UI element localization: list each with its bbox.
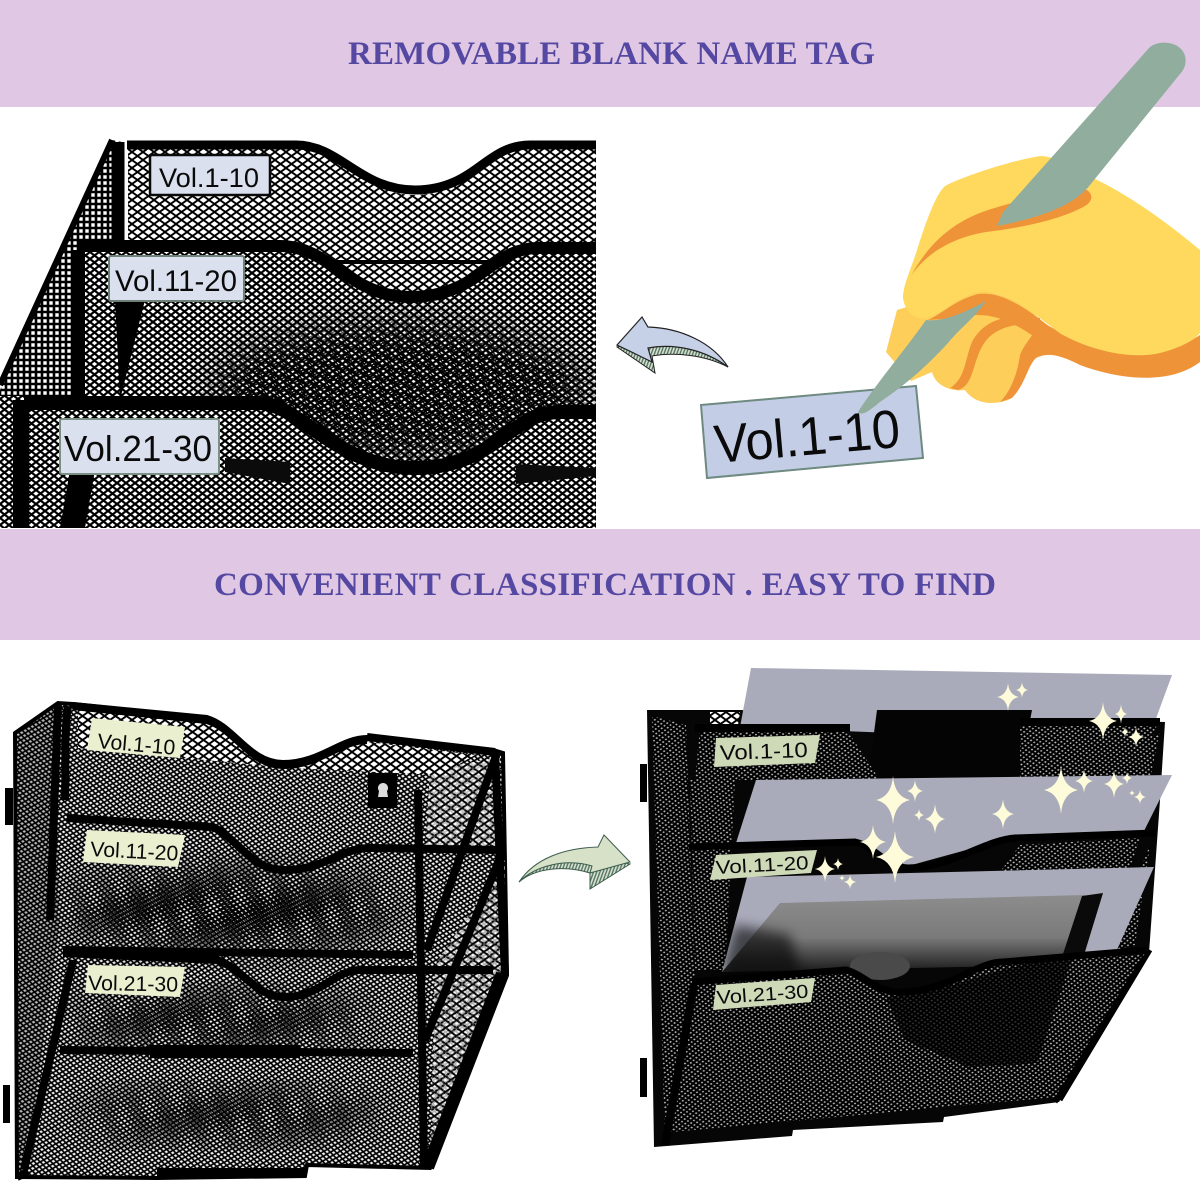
- front tier mesh: [671, 950, 1147, 1132]
- pen upper section: [997, 43, 1186, 226]
- label: vol 11-20: Vol.11-20: [90, 838, 179, 866]
- title: removable blank name tag: REMOVABLE BLANK NAME TAG: [348, 36, 875, 72]
- front tier rim: [24, 403, 596, 468]
- organizer body mesh: [15, 703, 507, 1178]
- arrow: curved left toward tag photo: [617, 317, 728, 373]
- pen lower section: [858, 301, 986, 414]
- name tag: vol 11-20: [109, 256, 244, 301]
- paper 3: [722, 867, 1154, 980]
- under-palm fold: [928, 294, 1061, 345]
- label: vol 21-30: [713, 978, 815, 1010]
- shelf shadow: [225, 458, 596, 484]
- back tier rim: [127, 145, 596, 190]
- right side mesh: [1115, 730, 1160, 950]
- front left rod: [665, 985, 694, 1145]
- tag handwriting: Vol.1-10: [712, 399, 902, 475]
- label: vol 11-20: [83, 830, 185, 867]
- middle tier rim: [78, 246, 596, 297]
- organizer body: [647, 710, 1165, 1147]
- tier 1 shadow and mesh: [695, 725, 1157, 780]
- label: vol 1-10: Vol.1-10: [97, 730, 176, 760]
- name tag: vol 11-20: Vol.11-20: [115, 265, 237, 298]
- denser moire weave: [182, 289, 596, 461]
- name tag: vol 1-10: Vol.1-10: [159, 163, 259, 193]
- panel: empty organizer with labels: [3, 703, 507, 1178]
- back tier mesh: [128, 150, 596, 291]
- orange fold: [911, 190, 1091, 276]
- name tag: vol 21-30: Vol.21-30: [64, 428, 212, 469]
- heading band: convenient classification: [0, 529, 1200, 640]
- name tag: vol 1-10: [150, 155, 270, 195]
- title: convenient classification: CONVENIENT CLASSIFICATION . EASY TO FIND: [214, 567, 996, 603]
- label: vol 21-30: [85, 965, 185, 997]
- paper 2: [736, 775, 1172, 866]
- heading band: removable blank name tag: [0, 0, 1200, 107]
- tier 1 rim: [695, 722, 1160, 728]
- left side mesh: [0, 140, 122, 400]
- left side shading: [15, 703, 58, 1177]
- panel: close-up photo of mesh organizer with labels: [0, 140, 596, 528]
- arrow: curved right toward filled organizer: [519, 835, 630, 889]
- tier 2 rim: [689, 833, 1156, 868]
- light back mesh: [78, 710, 475, 775]
- fingers: [886, 290, 1050, 403]
- black strip of photo: [1062, 893, 1103, 957]
- dark gradient edge: [722, 925, 800, 972]
- name tag: handwritten vol 1-10 sample: [701, 386, 923, 478]
- tier 2 mesh: [1000, 838, 1140, 872]
- keyhole plate: [368, 773, 397, 808]
- icon: hand writing on tag with pen: [858, 43, 1200, 414]
- curled finger shadow: [950, 316, 1040, 390]
- label: vol 11-20: Vol.11-20: [715, 853, 809, 879]
- label: vol 1-10: Vol.1-10: [719, 739, 808, 765]
- label: vol 11-20: [710, 850, 817, 880]
- photo seen through mesh: [886, 958, 1072, 1067]
- portrait head: [850, 952, 910, 980]
- organizer frame rods: [17, 705, 505, 1177]
- middle tier cross rod: [337, 260, 488, 264]
- bottom bar: [150, 1045, 306, 1178]
- front tier rim: [692, 950, 1147, 992]
- middle tier mesh: [85, 252, 596, 461]
- sparkles: [815, 682, 1146, 889]
- paper 1: [740, 668, 1172, 778]
- dark photo in paper 1: [868, 710, 1032, 778]
- clips: [640, 764, 647, 1097]
- bottom side mesh: [0, 396, 25, 528]
- label: vol 1-10: [714, 735, 820, 767]
- panel: organizer filled with documents: [640, 668, 1172, 1147]
- back of hand: [903, 156, 1200, 355]
- front tier mesh: [25, 402, 596, 528]
- label: vol 21-30: Vol.21-30: [88, 972, 178, 997]
- photo inside paper 3: [722, 895, 1085, 972]
- label: vol 1-10: [87, 718, 185, 760]
- hand shadow: [1000, 320, 1200, 402]
- label: vol 21-30: Vol.21-30: [716, 982, 809, 1009]
- moire weave shading: [50, 849, 416, 1150]
- mounting clips: [3, 788, 13, 1123]
- left side mesh: [652, 716, 695, 1140]
